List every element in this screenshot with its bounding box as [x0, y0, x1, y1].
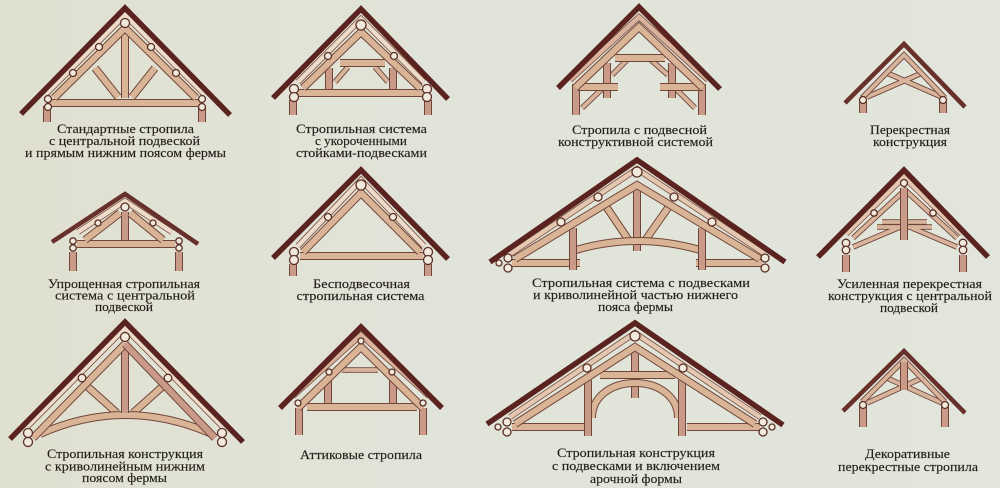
caption: конструктивной системой	[558, 134, 713, 149]
caption: с укороченными	[315, 133, 407, 148]
truss: standard rafters with king post	[21, 8, 230, 160]
truss: simplified with king post	[48, 194, 200, 314]
caption: пояса фермы	[598, 299, 673, 314]
truss: suspended structural system	[558, 7, 720, 149]
caption: с подвесками и включением	[552, 458, 720, 473]
truss: curved lower chord	[10, 322, 243, 485]
caption: Перекрестная	[870, 122, 950, 137]
caption: Стропильная конструкция	[557, 445, 715, 460]
truss: hangers with arch	[487, 323, 783, 486]
caption: с центральной подвеской	[49, 133, 200, 148]
caption: Стандартные стропила	[57, 121, 194, 136]
caption: арочной формы	[590, 471, 682, 486]
caption: конструкция с центральной	[828, 288, 992, 303]
caption: с криволинейным нижним	[45, 458, 205, 474]
caption: перекрестные стропила	[838, 459, 978, 474]
caption: Стропильная система с подвесками	[532, 275, 750, 290]
caption: Стропила с подвесной	[572, 122, 707, 137]
truss: decorative cross rafters	[838, 351, 978, 474]
truss: reinforced cross with king post	[818, 170, 992, 315]
caption: Стропильная конструкция	[47, 446, 203, 461]
caption: и прямым нижним поясом фермы	[25, 145, 226, 160]
truss: cross structure	[845, 44, 965, 149]
caption: система с центральной	[55, 288, 195, 302]
caption: Усиленная перекрестная	[837, 276, 982, 291]
truss: shortened hanging posts	[273, 9, 448, 160]
caption: Бесподвесочная	[313, 276, 410, 291]
caption: подвеской	[880, 300, 938, 315]
caption: стойками-подвесками	[296, 145, 427, 160]
caption: стропильная система	[296, 288, 425, 303]
caption: Декоративные	[865, 446, 950, 461]
caption: подвеской	[95, 299, 153, 314]
truss: attic rafters	[280, 327, 442, 462]
caption: поясом фермы	[82, 470, 167, 485]
truss: no-hanger system	[273, 170, 448, 303]
caption: Аттиковые стропила	[300, 447, 422, 462]
caption: и криволинейной частью нижнего	[533, 287, 738, 302]
caption: Стропильная система	[296, 121, 427, 136]
truss: hangers and curved lower chord	[490, 160, 785, 314]
caption: конструкция	[873, 134, 947, 149]
caption: Упрощенная стропильная	[48, 276, 200, 291]
